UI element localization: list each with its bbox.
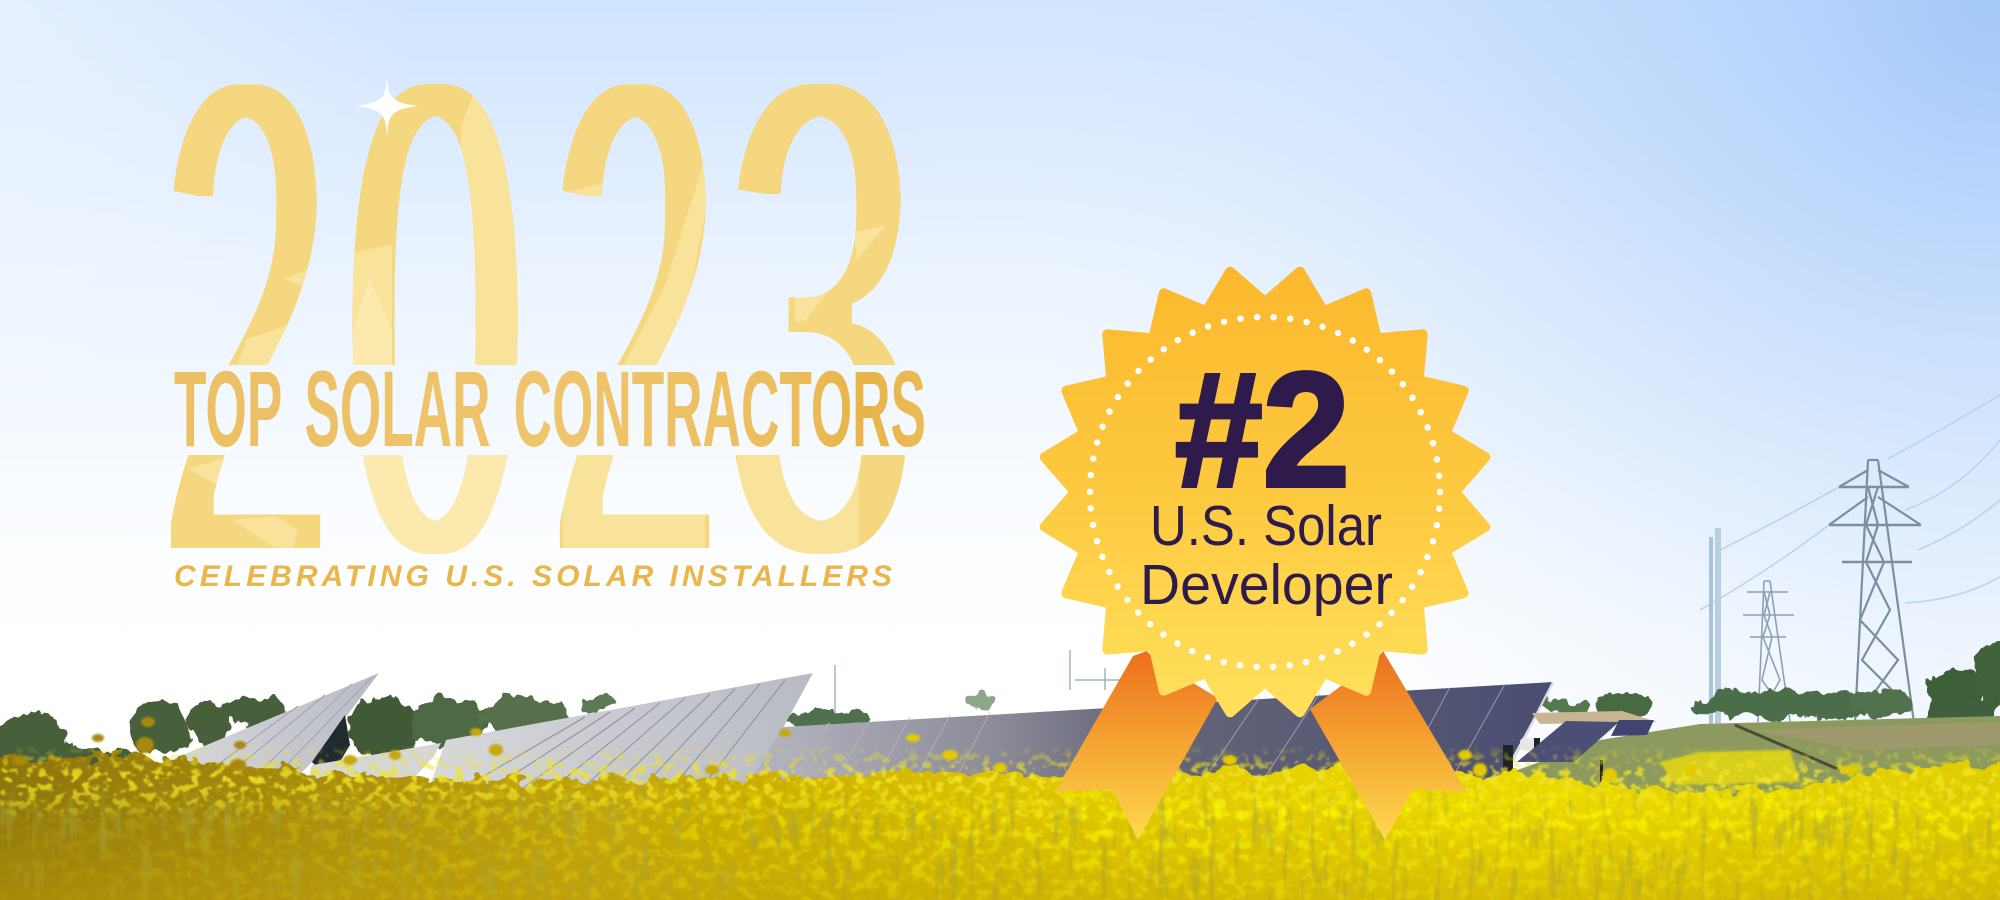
flower sprigs bbox=[12, 717, 1959, 782]
tree line bbox=[0, 638, 2000, 777]
rank number: #2 bbox=[1175, 338, 1350, 521]
ribbon: left bbox=[1055, 651, 1218, 840]
yellow flower meadow bbox=[0, 717, 2000, 900]
subtitle: celebrating installers: CELEBRATING U.S. SOLAR INSTALLERS bbox=[174, 560, 892, 593]
power lines bbox=[1700, 395, 2000, 610]
antenna mast bbox=[835, 650, 1120, 720]
panel: distant mound and small arrays bbox=[1517, 711, 1657, 800]
distant field bbox=[1490, 716, 2000, 815]
year 2023 large numerals bbox=[170, 84, 906, 554]
label: Developer: Developer bbox=[1140, 553, 1393, 617]
transmission tower large bbox=[1829, 460, 1921, 730]
award badge bbox=[1045, 272, 1485, 840]
panel: left bbox=[166, 673, 379, 815]
panel: center bbox=[300, 673, 813, 815]
rosette star bbox=[1045, 272, 1485, 712]
solar panel array bbox=[166, 673, 1657, 815]
label: U.S. Solar: U.S. Solar bbox=[1150, 494, 1382, 558]
infographic canvas: TOP SOLAR CONTRACTORS bbox=[174, 348, 926, 469]
ribbon: right bbox=[1310, 651, 1467, 840]
utility poles bbox=[1709, 528, 1721, 735]
icon: sparkle star bbox=[355, 76, 419, 138]
transmission tower small bbox=[1743, 581, 1794, 728]
panel: dark right bbox=[730, 682, 1553, 815]
dotted ring bbox=[1090, 317, 1440, 667]
